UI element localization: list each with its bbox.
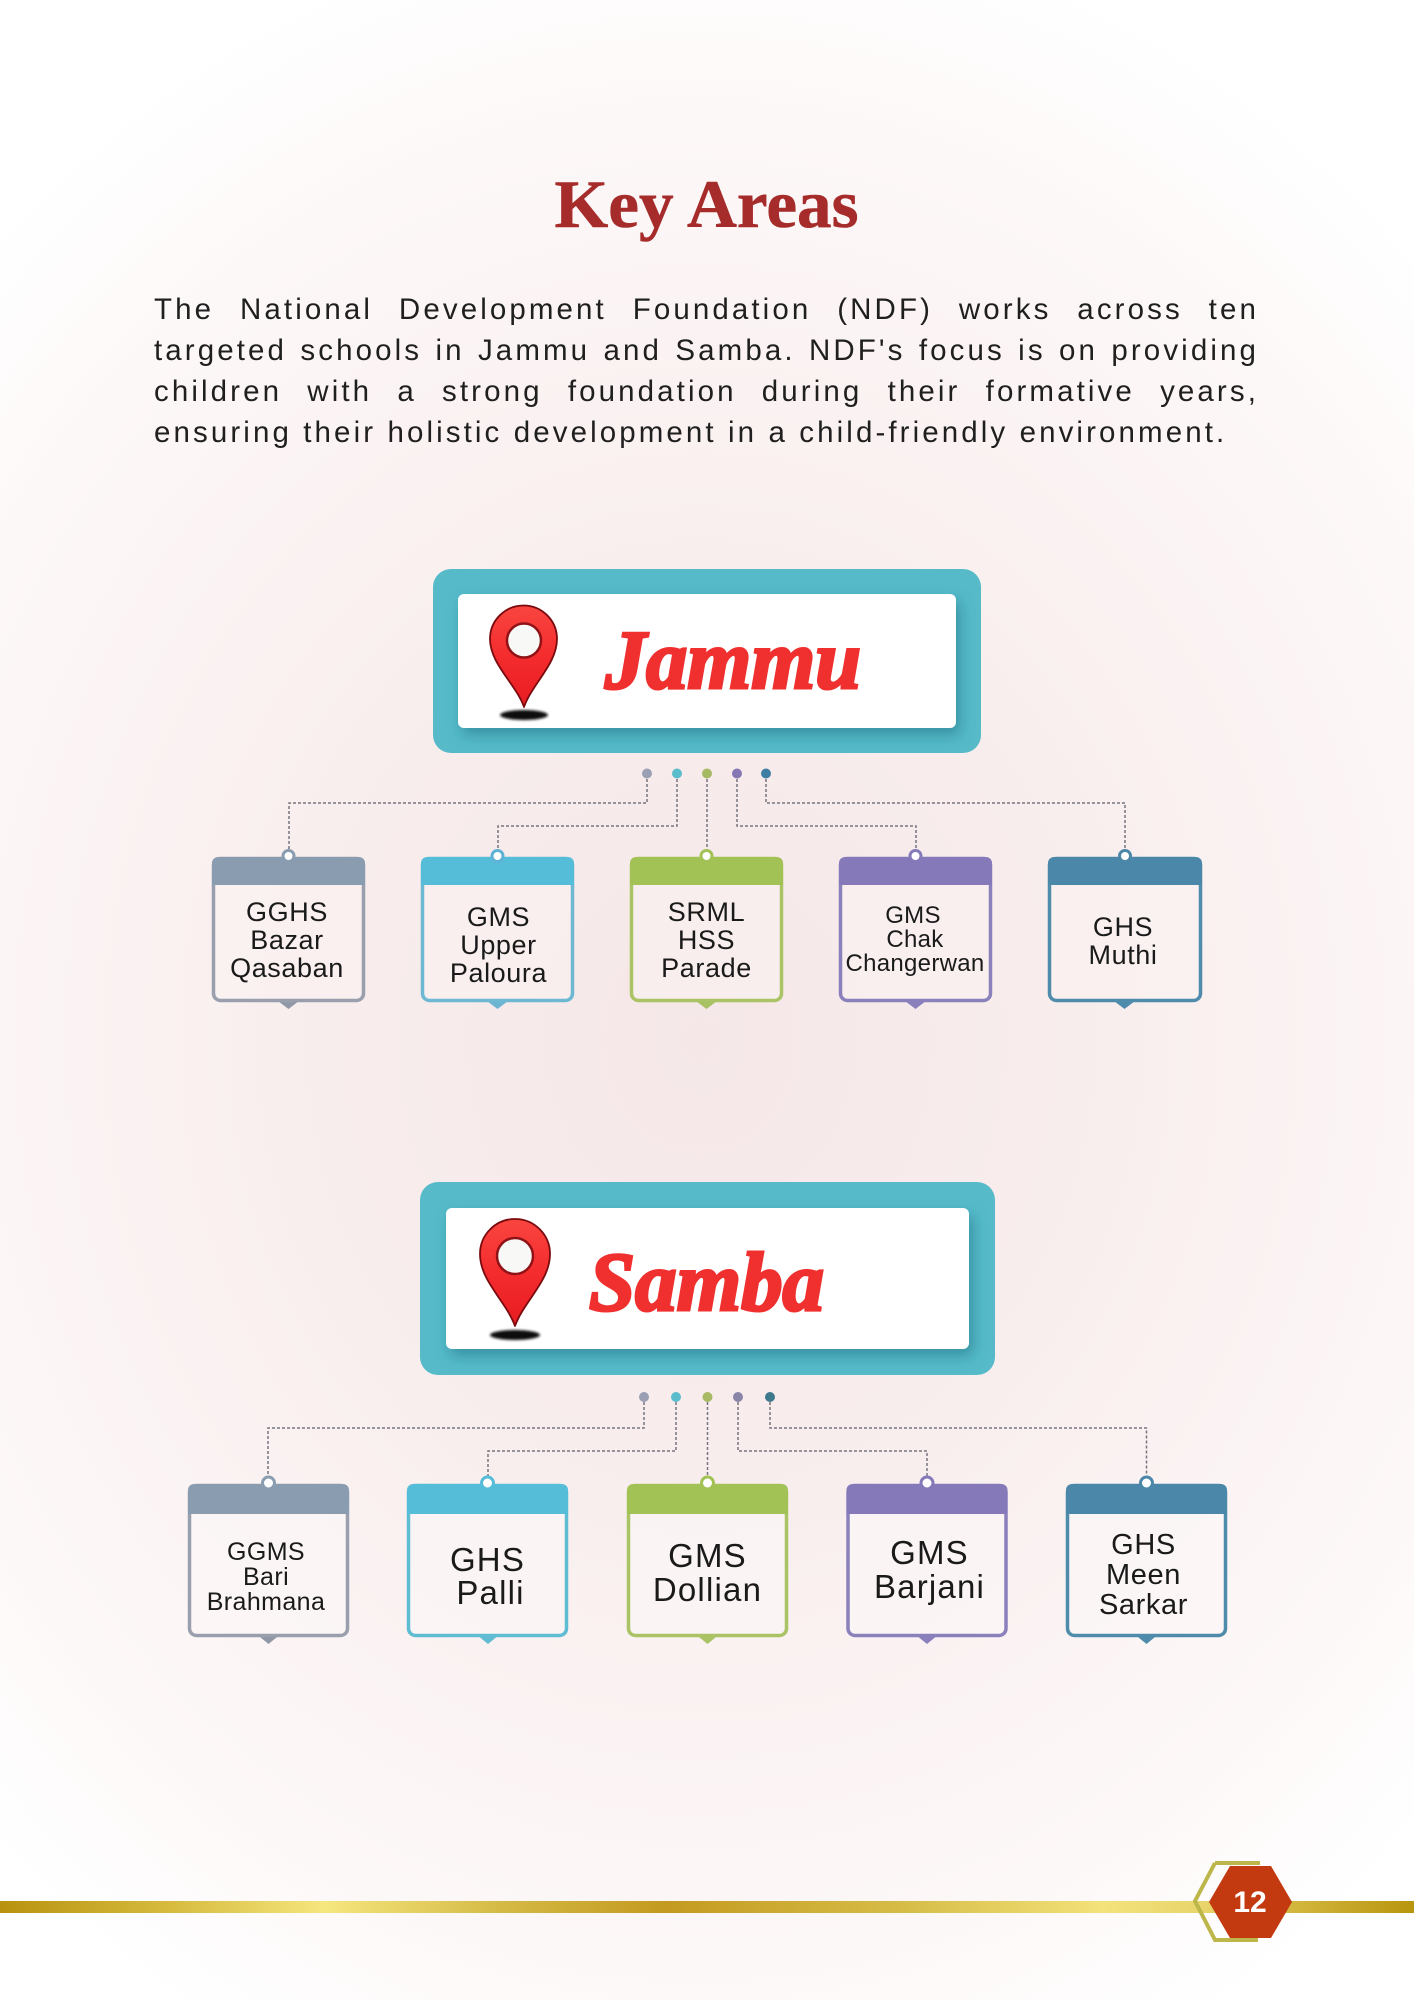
card: SRML HSS Parade: HSS [678,925,735,955]
card: GGHS Bazar Qasaban: Qasaban [230,953,344,983]
card: GMS Chak Changerwan: GMS [885,902,941,929]
footer rule [0,1901,1414,1913]
card: GMS Upper Paloura [421,850,574,1009]
icon: Samba map pin [480,1219,550,1340]
card: GMS Upper Paloura: GMS [467,902,530,932]
icon: Jammu map pin [490,606,557,720]
card: GMS Chak Changerwan: Changerwan [845,950,985,977]
card: GHS Muthi: GHS [1093,912,1153,942]
card: GMS Chak Changerwan: Chak [886,926,944,953]
card: GMS Dollian: GMS [668,1537,747,1574]
card: SRML HSS Parade: Parade [661,953,752,983]
card: GMS Upper Paloura: Upper [460,930,537,960]
card: GHS Palli [407,1477,568,1644]
intro paragraph: ensuring their holistic development in a child-friendly environment. [154,416,1227,449]
card: GHS Meen Sarkar: Sarkar [1099,1589,1188,1621]
card: GMS Chak Changerwan [839,850,992,1009]
card: GMS Dollian: Dollian [653,1571,762,1608]
card: GHS Palli: Palli [456,1574,525,1611]
intro paragraph: children with a strong foundation during their formative years, [154,375,1259,408]
Samba label: Samba [589,1236,824,1329]
card: GGMS Bari Brahmana: Bari [243,1563,289,1591]
intro paragraph [154,293,1259,449]
card: GGHS Bazar Qasaban: GGHS [246,897,328,927]
intro paragraph: targeted schools in Jammu and Samba. NDF's focus is on providing [154,334,1259,367]
card: GGMS Bari Brahmana: Brahmana [207,1588,325,1616]
card: GHS Meen Sarkar: GHS [1111,1529,1176,1561]
card: GHS Muthi: Muthi [1088,940,1158,970]
card: GMS Upper Paloura: Paloura [450,958,548,988]
title: Key Areas [554,166,858,242]
card: SRML HSS Parade: SRML [668,897,745,927]
panel: Samba [420,1182,995,1375]
card: GMS Dollian [627,1477,788,1644]
page number badge: 12 [1233,1886,1267,1919]
connectors: Jammu [289,768,1125,857]
card: GHS Meen Sarkar [1066,1477,1227,1644]
card: GMS Barjani: GMS [890,1534,969,1571]
card: GHS Muthi [1048,850,1202,1009]
card: GMS Barjani [846,1477,1008,1644]
connectors: Samba [268,1392,1146,1484]
card: GGMS Bari Brahmana: GGMS [227,1538,305,1566]
intro paragraph: The National Development Foundation (NDF) works across ten [154,293,1259,326]
card: GHS Palli: GHS [450,1541,525,1578]
card: SRML HSS Parade [630,850,783,1009]
card: GMS Barjani: Barjani [874,1568,985,1605]
card: GGHS Bazar Qasaban: Bazar [250,925,324,955]
panel: Jammu [433,569,981,753]
card: GGHS Bazar Qasaban [212,850,365,1009]
card: GHS Meen Sarkar: Meen [1106,1559,1181,1591]
page number badge [1195,1863,1292,1940]
Jammu label: Jammu [604,614,861,707]
card: GGMS Bari Brahmana [188,1477,349,1644]
